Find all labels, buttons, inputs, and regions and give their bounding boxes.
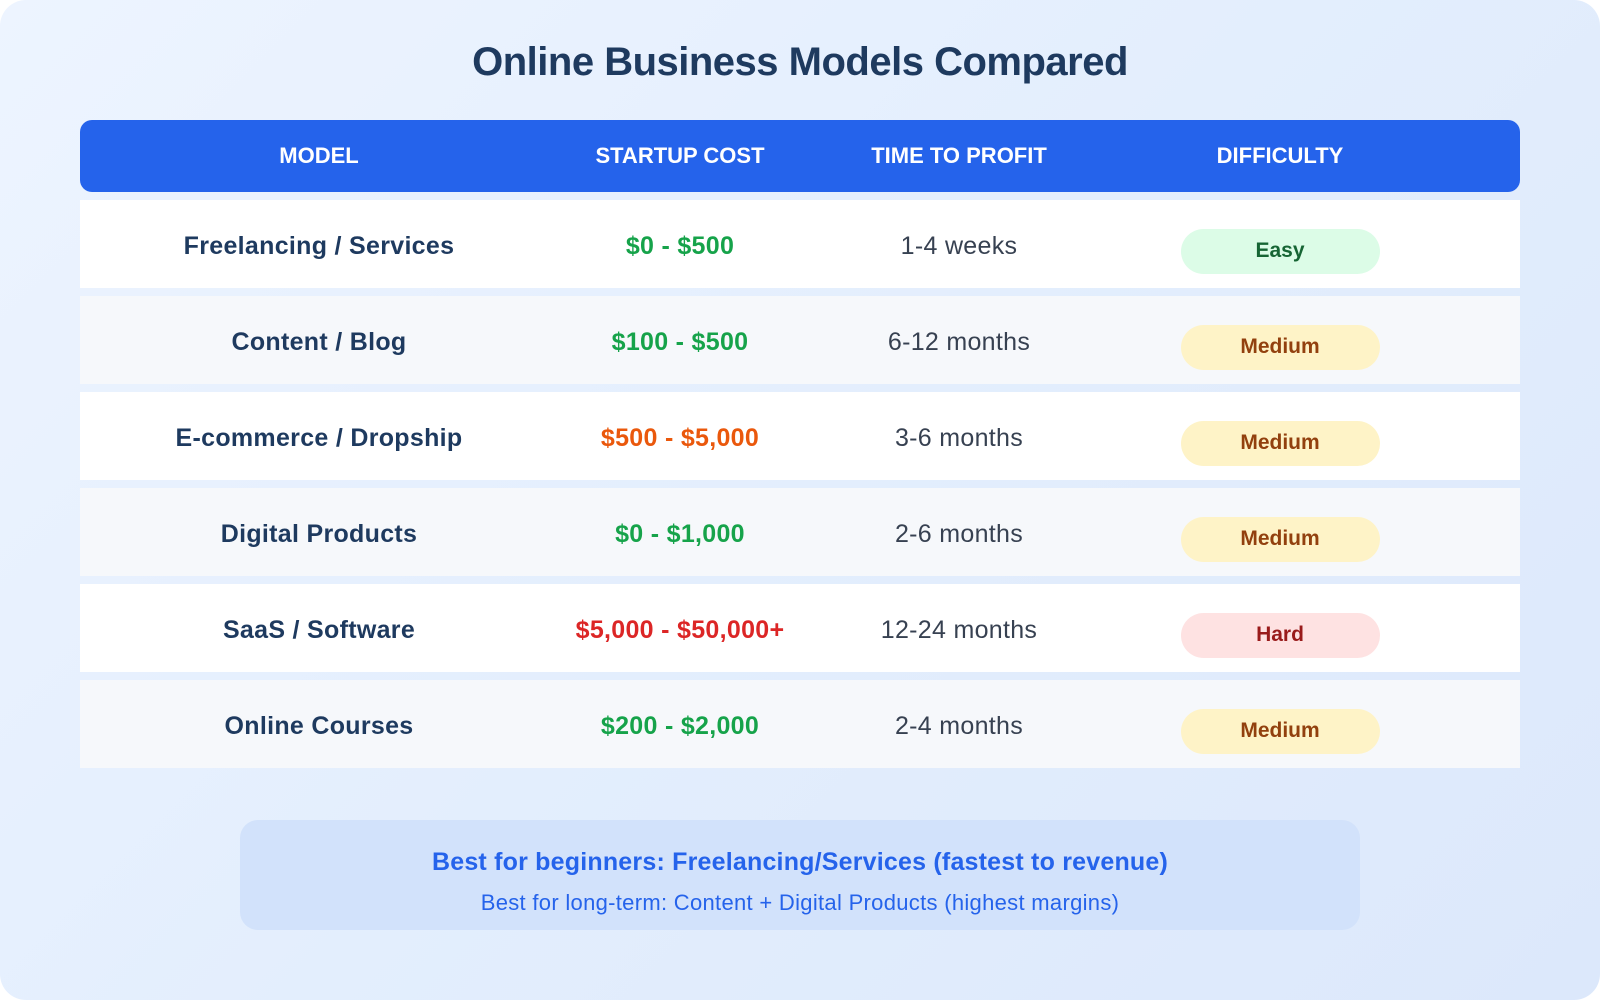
row: saas: SaaS / Software (223, 616, 415, 644)
callout: recommendations: Best for beginners: Freelancing/Services (fastest to revenue) (432, 848, 1168, 876)
row: freelancing: Freelancing / Services (184, 232, 454, 260)
row: digital products (80, 488, 1520, 576)
row: content: $100 - $500 (612, 328, 748, 356)
title: Online Business Models Compared (472, 40, 1128, 84)
table header: MODEL (279, 143, 359, 168)
table header (80, 120, 1520, 192)
row: courses: $200 - $2,000 (601, 712, 759, 740)
row: freelancing: $0 - $500 (626, 232, 734, 260)
row: content: Medium (1240, 335, 1320, 358)
row: ecommerce: Medium (1240, 431, 1320, 454)
row: saas (80, 584, 1520, 672)
row: ecommerce: 3-6 months (895, 424, 1023, 452)
row: saas: Hard (1256, 623, 1304, 646)
row: saas: 12-24 months (881, 616, 1037, 644)
row: ecommerce (80, 392, 1520, 480)
row: content: 6-12 months (888, 328, 1030, 356)
table header: STARTUP COST (595, 143, 765, 168)
row: content (80, 296, 1520, 384)
row: digital products: Digital Products (221, 520, 417, 548)
table header: TIME TO PROFIT (871, 143, 1047, 168)
row: courses: Online Courses (225, 712, 413, 740)
row: ecommerce: $500 - $5,000 (601, 424, 759, 452)
row: digital products: 2-6 months (895, 520, 1023, 548)
row: freelancing: Easy (1255, 239, 1305, 262)
table header: DIFFICULTY (1217, 143, 1343, 168)
row: ecommerce: E-commerce / Dropship (176, 424, 462, 452)
row: courses: Medium (1240, 719, 1320, 742)
row: courses: 2-4 months (895, 712, 1023, 740)
row: digital products: $0 - $1,000 (615, 520, 745, 548)
row: digital products: Medium (1240, 527, 1320, 550)
row: content: Content / Blog (231, 328, 406, 356)
row: courses (80, 680, 1520, 768)
callout: recommendations (240, 820, 1360, 930)
callout: recommendations: Best for long-term: Content + Digital Products (highest margins) (481, 890, 1119, 915)
row: freelancing: 1-4 weeks (901, 232, 1017, 260)
row: saas: $5,000 - $50,000+ (576, 616, 784, 644)
row: freelancing (80, 200, 1520, 288)
